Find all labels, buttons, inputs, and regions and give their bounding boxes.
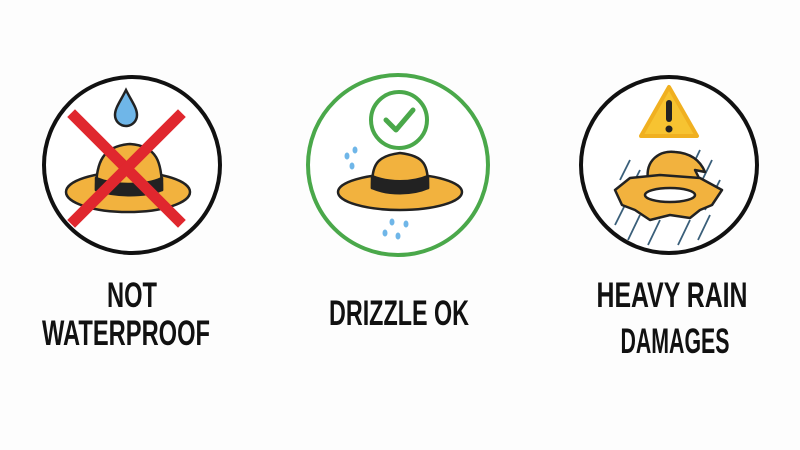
label: not waterproof bbox=[42, 276, 210, 353]
icon: drizzle drops bbox=[344, 146, 408, 240]
circle frame left bbox=[44, 77, 220, 253]
icon: damaged hat bbox=[615, 152, 722, 220]
label: not waterproof: WATERPROOF bbox=[42, 314, 210, 353]
icon: check mark bbox=[371, 92, 427, 148]
icon: water drop bbox=[115, 90, 137, 126]
circle frame middle bbox=[308, 75, 488, 255]
icon: hat middle bbox=[338, 153, 462, 210]
circle frame right bbox=[581, 77, 757, 253]
label: heavy rain damages: DAMAGES bbox=[620, 322, 730, 361]
label: heavy rain damages bbox=[596, 276, 748, 361]
panel: not waterproof bbox=[44, 77, 220, 253]
icon: hat left bbox=[66, 144, 190, 212]
icon: red X bbox=[75, 117, 178, 220]
panel: heavy rain damages bbox=[581, 77, 757, 253]
icon: rain streaks bbox=[615, 150, 720, 245]
panel: drizzle ok bbox=[308, 75, 488, 255]
icon: warning triangle bbox=[641, 87, 697, 136]
label: not waterproof: NOT bbox=[107, 276, 157, 315]
label: drizzle ok: DRIZZLE OK bbox=[329, 294, 469, 333]
